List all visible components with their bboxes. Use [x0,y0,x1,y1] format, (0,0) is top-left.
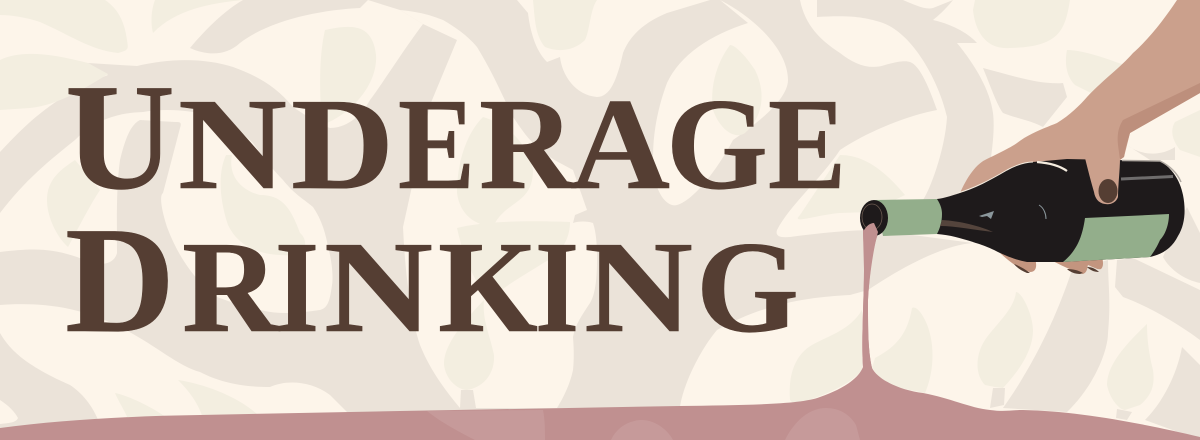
title: N [324,215,433,360]
title: E [768,72,846,217]
lip rim [862,204,882,230]
title: R [182,215,280,360]
hand and arm [958,0,1200,274]
bottle lip [860,200,888,236]
wine stream [862,223,878,368]
thumb finger [1085,158,1120,204]
pool highlights [427,408,860,440]
fingers under bottle [1000,253,1103,274]
bottle neck foil [875,199,942,236]
wine pool [0,224,1200,440]
star glint [979,211,994,219]
title: D [291,72,394,217]
neck reflection [940,220,993,232]
bottle label [1063,214,1169,262]
title: I [535,215,579,360]
title: K [438,215,538,360]
fingernails [1014,264,1099,274]
title: N [584,215,693,360]
shoulder edge highlight [958,162,1033,193]
thumb nail [1098,179,1118,203]
title: U [65,53,175,221]
bottle highlights [1037,162,1067,171]
label stripe [1121,176,1173,179]
title: G [666,72,768,217]
title: R [479,72,576,217]
edge glint [1122,160,1181,182]
title: I [275,215,319,360]
title: G [696,215,799,360]
wine bottle [860,158,1185,262]
title: N [178,72,287,217]
curved glint [1039,205,1046,219]
title: E [398,72,475,217]
title: D [65,196,175,364]
title: A [570,72,670,217]
